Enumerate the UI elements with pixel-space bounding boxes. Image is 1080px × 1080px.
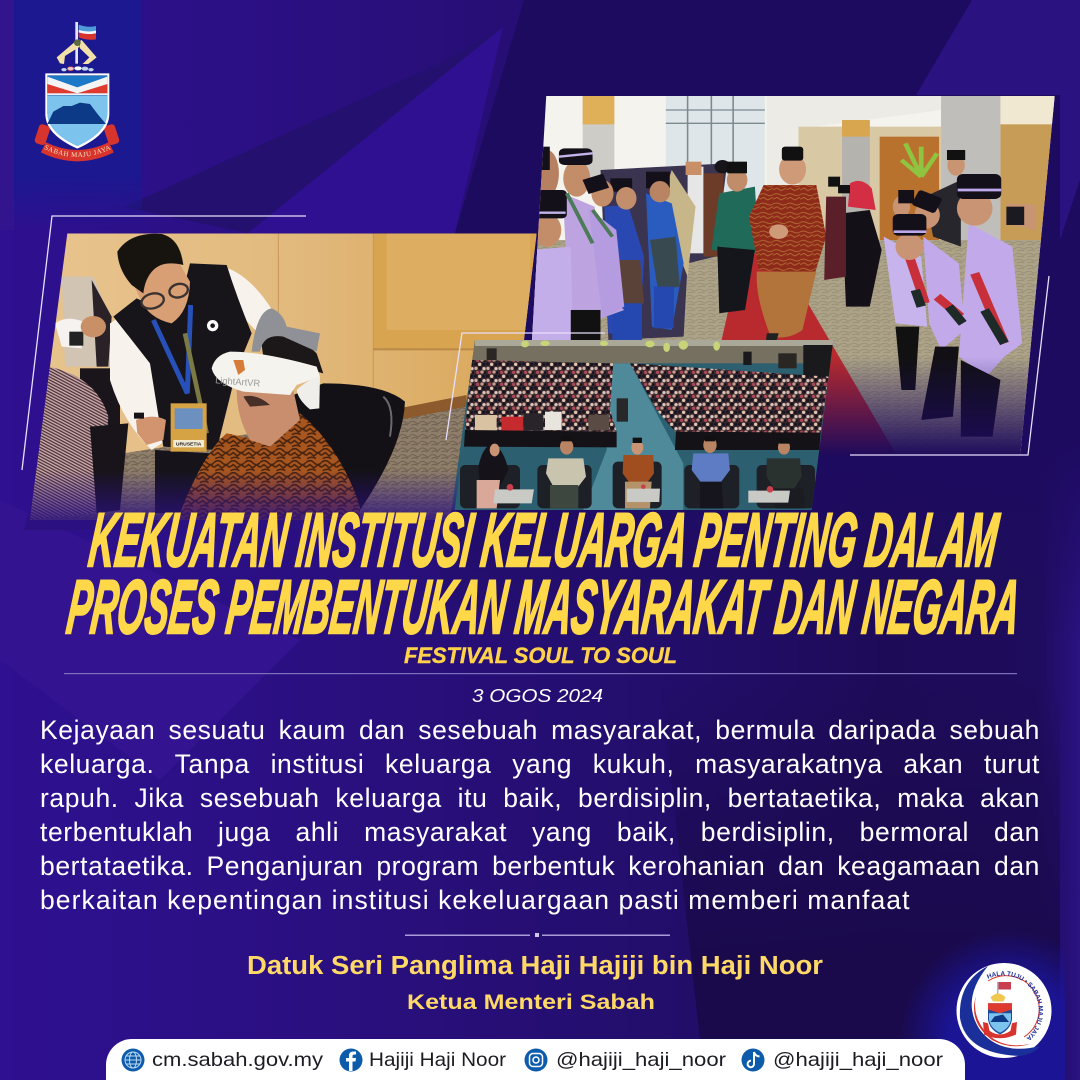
- body paragraph: terbentuklah juga ahli masyarakat yang baik, berdisiplin, bermoral dan: [40, 817, 1040, 847]
- carpet: [722, 253, 893, 450]
- green shirt man: [711, 162, 759, 313]
- main VIP man: [749, 147, 826, 340]
- body paragraph: rapuh. Jika sesebuah keluarga itu baik, berdisiplin, bertataetika, maka akan: [40, 783, 1040, 813]
- VIP row: [460, 436, 815, 508]
- photo: VR headset demonstration: [30, 233, 543, 520]
- photo frame lines: [22, 216, 1049, 470]
- instagram handle: @hajiji_haji_noor: [556, 1049, 727, 1071]
- VR headset: [212, 352, 320, 409]
- shield: [45, 73, 109, 149]
- stairs: [583, 363, 683, 510]
- room: [525, 96, 1056, 456]
- position: Ketua Menteri Sabah: [407, 990, 655, 1014]
- icon: facebook: [340, 1048, 362, 1072]
- seal ring text: [988, 975, 1039, 1041]
- left hats and faces: [610, 172, 670, 192]
- seal: Hala Tuju Sabah Maju Jaya: [956, 963, 1052, 1058]
- motto: [43, 149, 112, 157]
- body paragraph: keluarga. Tanpa institusi keluarga yang kukuh, masyarakatnya akan turut: [40, 749, 1040, 779]
- dark table behind: [80, 368, 120, 426]
- title: [63, 498, 1024, 650]
- blue banner behind crest: [14, 0, 142, 230]
- ribbon: [34, 123, 120, 156]
- name: Datuk Seri Panglima Haji Hajiji bin Haji Noor: [247, 952, 823, 980]
- divider: [405, 933, 670, 937]
- ID badge: URUSETIA: [176, 442, 202, 448]
- mini crest: [983, 982, 1017, 1038]
- subtitle: FESTIVAL SOUL TO SOUL: [404, 643, 677, 668]
- icon: tiktok: [742, 1048, 764, 1072]
- hand: [136, 417, 166, 445]
- icon: web: [122, 1048, 144, 1072]
- body paragraph: bertataetika. Penganjuran program berbentuk kerohanian dan keagamaan dan: [40, 851, 1040, 881]
- crowd: [465, 360, 828, 433]
- seal inner red ring: [988, 976, 1039, 1037]
- seated lady patterned dress: [30, 367, 108, 520]
- ID badge: [171, 403, 207, 452]
- wall: [30, 233, 543, 520]
- left purple students: [563, 193, 624, 320]
- seated man face: [237, 390, 300, 447]
- lanyard: [153, 305, 191, 393]
- standing man trousers: [155, 450, 210, 513]
- tiktok handle: @hajiji_haji_noor: [773, 1049, 944, 1071]
- right back guests: [824, 177, 882, 307]
- blue glow behind seal: [900, 930, 1065, 1080]
- vest: [113, 263, 252, 450]
- floor: [525, 240, 1056, 457]
- tables: [464, 430, 821, 450]
- chair: [90, 423, 128, 513]
- icon: instagram: [524, 1048, 548, 1072]
- body paragraph: [40, 715, 1040, 915]
- VR headset: LightArtVR: [215, 375, 261, 388]
- crest: Sabah coat of arms: [34, 22, 120, 162]
- photo: Festival audience: [450, 340, 837, 513]
- flag: [75, 22, 96, 64]
- photo: walkabout greeting students: [525, 96, 1056, 457]
- website: cm.sabah.gov.my: [152, 1049, 323, 1071]
- front row guests: [475, 412, 609, 432]
- left back row: [600, 160, 730, 340]
- glasses: [140, 282, 189, 311]
- right students: [884, 174, 1036, 437]
- crest: Sabah coat of arms: SABAH MAJU JAYA: [44, 145, 111, 157]
- seal: Hala Tuju Sabah Maju Jaya: HALA TUJU • SABAH MAJU JAYA: [986, 971, 1044, 1040]
- body paragraph: Kejayaan sesuatu kaum dan sesebuah masyarakat, bermula daripada sebuah: [40, 715, 1040, 745]
- pin: [207, 320, 218, 331]
- date: 3 OGOS 2024: [472, 686, 603, 706]
- white shirt sleeves: [228, 268, 272, 330]
- man head and hair: [135, 264, 190, 324]
- headset straps: [252, 308, 320, 352]
- facebook handle: Hajiji Haji Noor: [369, 1049, 507, 1071]
- seated man shirt: [180, 413, 360, 520]
- fade: [818, 362, 1029, 455]
- background person: [62, 277, 112, 367]
- social bar: [106, 1039, 965, 1080]
- arms: [57, 39, 97, 64]
- body paragraph: berkaitan kepentingan institusi kekeluargaan pasti memberi manfaat: [40, 885, 910, 915]
- bottom fade over left photo: [24, 470, 460, 530]
